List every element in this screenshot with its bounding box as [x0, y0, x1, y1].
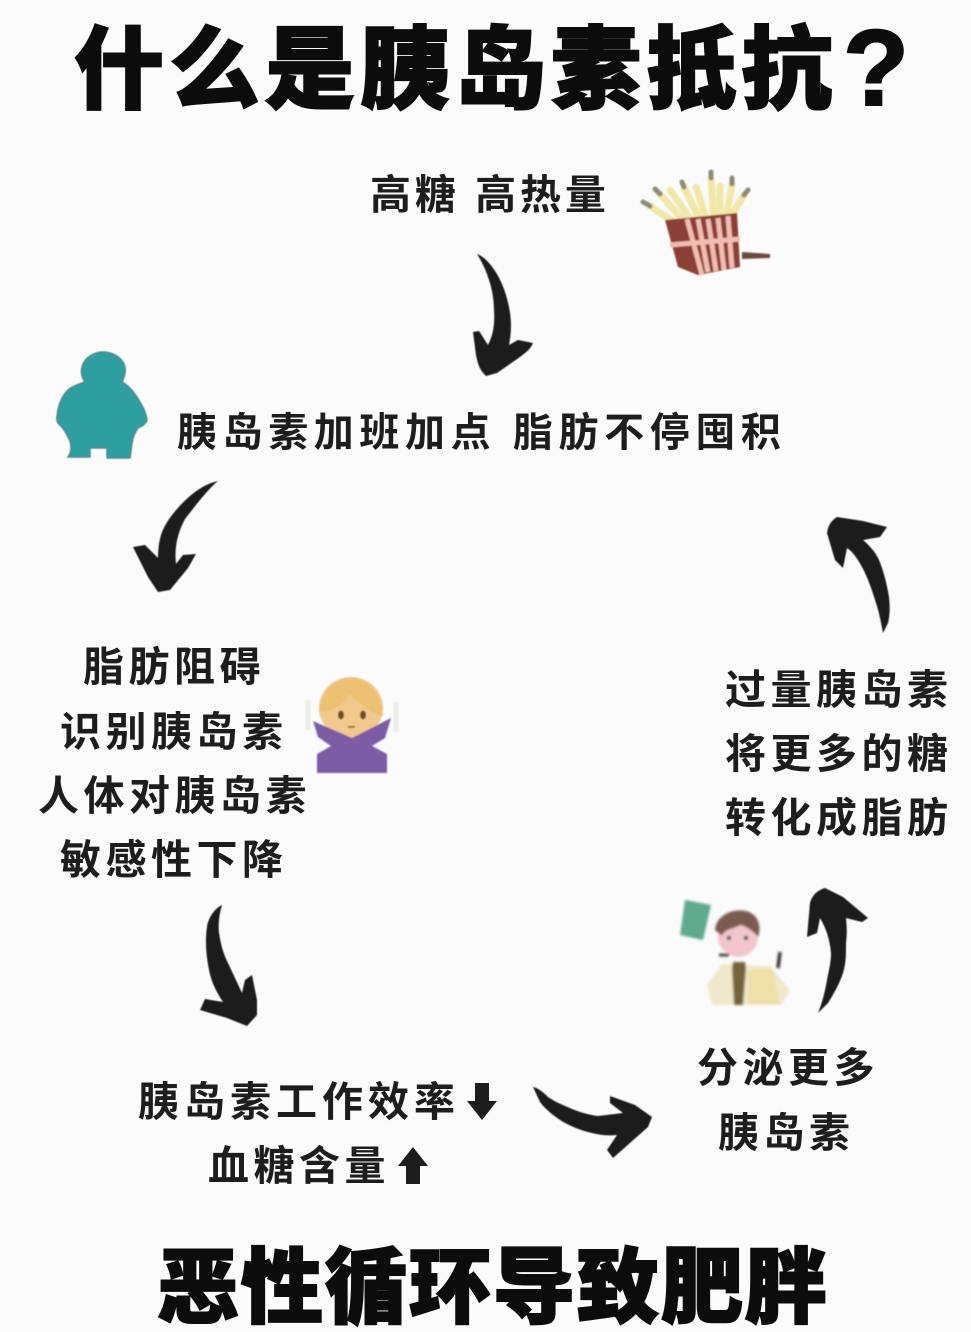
arrow: efficiency to secretion — [533, 1087, 652, 1158]
text: high sugar high calorie: 高糖 高热量 — [370, 172, 610, 218]
icon: fat figure — [57, 352, 147, 458]
arrow: food to insulin — [473, 254, 533, 376]
text block: excess insulin: 将更多的糖 — [725, 731, 952, 777]
text block: fat blocks insulin: 人体对胰岛素 — [38, 773, 311, 819]
arrow: excess insulin back to overtime — [827, 517, 890, 633]
text block: secrete more insulin: 胰岛素 — [718, 1110, 854, 1156]
text block: excess insulin — [725, 667, 952, 841]
text block: insulin efficiency and blood sugar — [138, 1079, 460, 1189]
text block: fat blocks insulin: 识别胰岛素 — [60, 709, 288, 755]
text block: insulin efficiency and blood sugar: 血糖含量 — [208, 1143, 390, 1189]
arrow: insulin to fat blocking — [133, 481, 218, 592]
text block: fat blocks insulin: 脂肪阻碍 — [83, 644, 265, 690]
text block: insulin efficiency and blood sugar: 胰岛素工作效率 — [138, 1079, 460, 1125]
icon: blood sugar up arrow — [398, 1147, 428, 1184]
text block: secrete more insulin — [697, 1045, 879, 1156]
icon: french fries — [643, 172, 770, 275]
icon: person crossing arms — [308, 677, 396, 773]
text block: fat blocks insulin: 敏感性下降 — [60, 837, 288, 883]
title: ? — [843, 7, 914, 128]
arrow: secretion to excess insulin — [807, 888, 868, 1013]
text: insulin overtime: 胰岛素加班加点 脂肪不停囤积 — [177, 411, 787, 455]
arrow: sensitivity to efficiency — [200, 905, 257, 1026]
title: 什么是胰岛素抵抗 — [74, 21, 837, 121]
text block: excess insulin: 转化成脂肪 — [725, 795, 952, 841]
text block: excess insulin: 过量胰岛素 — [725, 667, 952, 713]
text block: fat blocks insulin — [38, 644, 311, 883]
icon: stressed office worker — [680, 900, 790, 1005]
icon: efficiency down arrow — [467, 1083, 497, 1120]
bottom headline: 恶性循环导致肥胖 — [157, 1243, 829, 1332]
text block: secrete more insulin: 分泌更多 — [697, 1045, 879, 1091]
